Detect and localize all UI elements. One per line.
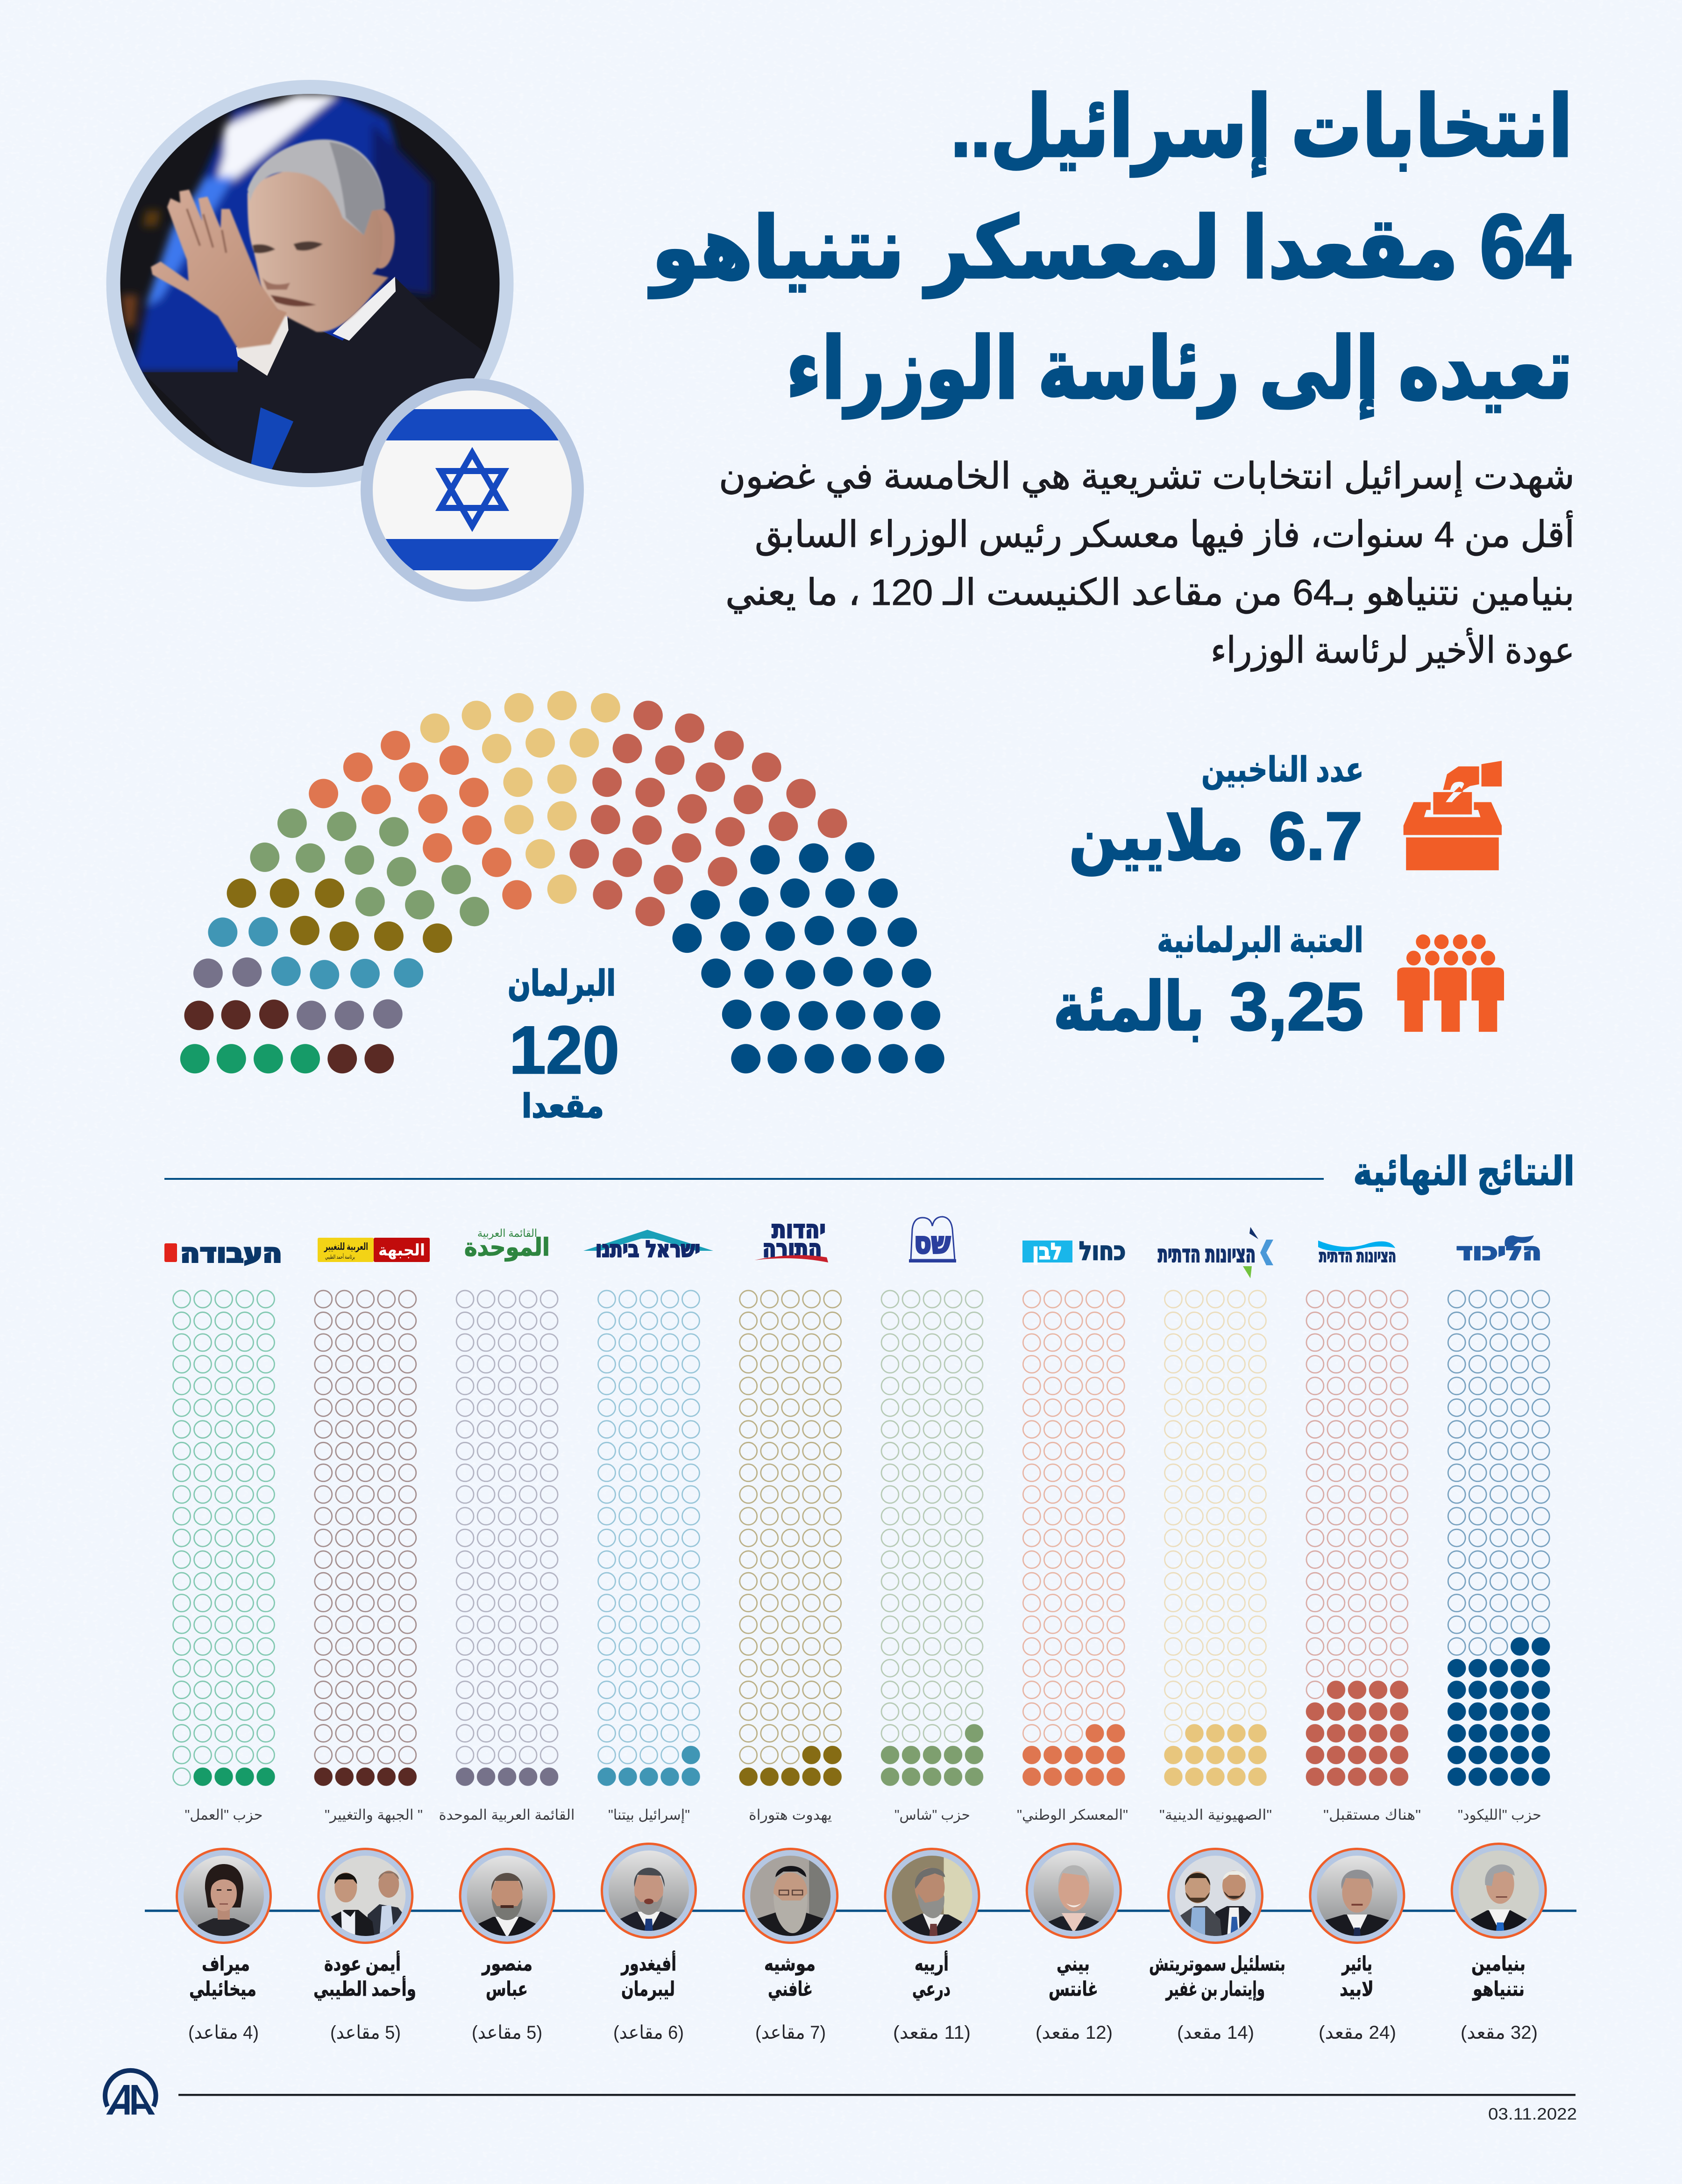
leader names: أيمن عودة	[324, 1950, 401, 1976]
party logo: Shas	[909, 1217, 956, 1262]
seat grid: Raam 5	[456, 1291, 558, 1785]
party logo: Likud: הליכוד	[1456, 1238, 1541, 1265]
seat counts: (32 مقعد)	[1461, 2022, 1538, 2043]
intro paragraph: بنيامين نتنياهو بـ64 من مقاعد الكنيست الـ 120 ، ما يعني	[725, 572, 1575, 614]
intro paragraph: أقل من 4 سنوات، فاز فيها معسكر رئيس الوزراء السابق	[755, 511, 1575, 556]
seats: Yesh Atid	[569, 701, 847, 926]
leader names: لابيد	[1340, 1978, 1374, 2000]
party logo: Religious Zionism with arrow	[1158, 1227, 1273, 1278]
stat: parliamentary threshold: العتبة البرلمانية	[1157, 921, 1363, 960]
portrait: Deri	[885, 1849, 979, 1943]
seat counts: (24 مقعد)	[1319, 2022, 1396, 2043]
leader names: ليبرمان	[621, 1978, 675, 2001]
seat counts: (5 مقاعد)	[330, 2022, 401, 2043]
party names row: حزب "الليكود"	[1458, 1807, 1541, 1823]
portrait: Odeh and Tibi	[319, 1849, 412, 1943]
stat: voters: عدد الناخبين	[1201, 750, 1364, 790]
party logo: Blue and White: לבן	[1032, 1239, 1062, 1265]
stat: voters	[1069, 750, 1364, 876]
seats: UTJ	[227, 879, 452, 953]
seats: Yisrael Beitenu	[208, 917, 423, 989]
intro paragraph	[719, 455, 1575, 672]
seat grid: Yesh Atid 24	[1306, 1291, 1408, 1785]
logo: Anadolu Agency	[105, 2071, 156, 2114]
party names row: "الصهيونية الدينية"	[1159, 1807, 1272, 1823]
title: انتخابات إسرائيل..	[951, 79, 1573, 177]
icon: ballot box	[1404, 761, 1502, 870]
hemicycle centre label: parliament 120 seats: 120	[509, 1012, 619, 1088]
leader names: ميراف	[202, 1953, 250, 1976]
party names row: حزب "العمل"	[185, 1807, 263, 1823]
seat counts	[188, 2022, 1538, 2043]
portrait: Smotrich and Ben Gvir	[1169, 1849, 1262, 1943]
photo: Netanyahu waving in ring	[106, 80, 514, 487]
leader names: وأحمد الطيبي	[313, 1976, 416, 2001]
party logo: United Torah Judaism: התורה	[762, 1235, 822, 1263]
leader names: غافني	[768, 1978, 813, 2001]
leader names: درعي	[912, 1978, 951, 2001]
party logo: Labor: העבודה	[180, 1238, 282, 1269]
stat: parliamentary threshold	[1053, 921, 1363, 1044]
leader names: ميخائيلي	[189, 1978, 256, 2001]
portrait: Abbas	[460, 1849, 554, 1943]
stat: parliamentary threshold: بالمئة	[1053, 969, 1205, 1044]
date: 03.11.2022	[1488, 2105, 1577, 2123]
portrait: Gafni	[744, 1849, 837, 1943]
seat grid: Shas 11	[881, 1291, 983, 1785]
hemicycle centre label: parliament 120 seats: البرلمان	[508, 964, 616, 1004]
leader names: وإيتمار بن غفير	[1165, 1978, 1265, 2001]
seats: National Unity	[309, 731, 532, 909]
leader names: بتسلئيل سموتريتش	[1149, 1953, 1285, 1976]
party logo: Shas: שס	[914, 1226, 951, 1261]
party names row: "هناك مستقبل"	[1323, 1807, 1421, 1823]
seat grid: United Torah Judaism 7	[740, 1291, 841, 1785]
seat counts: (6 مقاعد)	[613, 2022, 684, 2043]
icon: group of people	[1397, 935, 1504, 1032]
stat: voters: ملايين	[1069, 799, 1244, 876]
party names row: " الجبهة والتغيير"	[325, 1807, 423, 1823]
leader names: أفيغدور	[621, 1950, 676, 1976]
party logo: Hadash-Taal	[318, 1238, 430, 1262]
chart: parliament hemicycle seats	[180, 691, 944, 1073]
party logo: Yisrael Beitenu: ישראל ביתנו	[596, 1236, 700, 1262]
title: 64 مقعدا لمعسكر نتنياهو	[648, 196, 1571, 298]
party logo: Yisrael Beitenu	[583, 1230, 713, 1262]
party logo: Hadash-Taal: برئاسة أحمد الطيبي	[325, 1253, 355, 1261]
party logo: Raam: القائمة العربية	[477, 1227, 537, 1240]
portrait: Netanyahu	[1452, 1844, 1546, 1937]
party logo: Yesh Atid column: הציונות הדתית	[1319, 1246, 1396, 1266]
hemicycle centre label: parliament 120 seats: مقعدا	[522, 1088, 604, 1124]
seats: Shas	[250, 808, 489, 926]
party logo: Hadash-Taal: الجبهة	[378, 1241, 425, 1260]
seat counts: (14 مقعد)	[1177, 2022, 1254, 2043]
leader names: بيني	[1057, 1953, 1090, 1976]
leader names: غانتس	[1049, 1978, 1098, 2000]
hemicycle centre label: parliament 120 seats	[508, 964, 619, 1124]
title	[648, 79, 1573, 419]
party logo: Religious Zionism with arrow: הציונות הדתית	[1158, 1241, 1256, 1268]
seat counts: (12 مقعد)	[1036, 2022, 1113, 2043]
seat grid: Religious Zionism 14	[1165, 1291, 1266, 1785]
stat: parliamentary threshold: 3,25	[1230, 969, 1363, 1044]
party names row: حزب "شاس"	[894, 1807, 970, 1823]
party names row	[185, 1807, 1541, 1823]
seats: Likud	[673, 842, 944, 1073]
party logo: Blue and White: כחול	[1079, 1236, 1126, 1266]
leader names: موشيه	[764, 1953, 816, 1976]
leader names: أرييه	[915, 1950, 949, 1975]
seat grid: Hadash-Taal 5	[315, 1291, 416, 1785]
leader names: منصور	[481, 1953, 532, 1976]
leader names: بنيامين	[1471, 1953, 1526, 1976]
party names row: "المعسكر الوطني"	[1017, 1807, 1128, 1823]
party logo: United Torah Judaism: יהדות	[772, 1216, 826, 1244]
party logo: Blue and White	[1022, 1236, 1126, 1266]
seat counts: (11 مقعد)	[893, 2022, 971, 2043]
seat grid: Yisrael Beitenu 6	[598, 1291, 700, 1785]
party logo: United Torah Judaism	[754, 1216, 828, 1263]
leader names: يائير	[1341, 1953, 1372, 1976]
seat counts: (5 مقاعد)	[472, 2022, 542, 2043]
seats: Raam	[193, 957, 403, 1030]
portrait: Gantz	[1027, 1844, 1121, 1937]
seats: Labor	[180, 1044, 320, 1073]
party logo: Hadash-Taal: العربية للتغيير	[324, 1241, 368, 1252]
leader names: عباس	[486, 1978, 528, 2000]
seat counts: (7 مقاعد)	[755, 2022, 826, 2043]
intro paragraph: شهدت إسرائيل انتخابات تشريعية هي الخامسة في غضون	[719, 455, 1575, 498]
portrait: Michaeli	[177, 1849, 271, 1943]
stat: voters: 6.7	[1269, 798, 1363, 874]
intro paragraph: عودة الأخير لرئاسة الوزراء	[1211, 628, 1575, 672]
icon: Israeli flag badge	[361, 378, 584, 602]
party logo: Yesh Atid column	[1318, 1241, 1396, 1266]
seat grid: Likud 32	[1448, 1291, 1549, 1785]
seat counts: (4 مقاعد)	[188, 2022, 259, 2043]
leader names	[189, 1950, 1526, 2001]
party names row: "إسرائيل بيتنا"	[608, 1807, 690, 1823]
portrait: Lieberman	[602, 1844, 696, 1937]
party names row: يهدوت هتوراة	[749, 1807, 832, 1823]
party logo: Raam: الموحدة	[464, 1234, 550, 1262]
section heading: final results: النتائج النهائية	[1353, 1149, 1575, 1195]
seats: Religious Zionism	[420, 691, 620, 904]
section heading: final results	[164, 1149, 1575, 1195]
seat grid: National Unity 12	[1023, 1291, 1124, 1785]
party names row: القائمة العربية الموحدة	[439, 1807, 575, 1823]
leader names: نتنياهو	[1472, 1978, 1525, 2001]
seats: Hadash-Taal	[184, 1000, 394, 1073]
portrait: Lapid	[1310, 1849, 1404, 1943]
seat grid: Labor 4	[173, 1291, 275, 1785]
